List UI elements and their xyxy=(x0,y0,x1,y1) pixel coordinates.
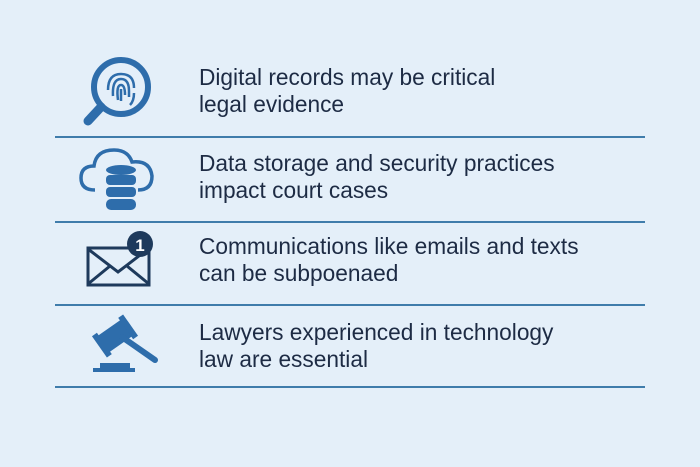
text: row 2 xyxy=(199,150,555,203)
text: row 2: Data storage and security practices xyxy=(199,150,555,176)
text: row 1: Digital records may be critical xyxy=(199,64,495,90)
icon: cloud database xyxy=(81,150,152,210)
icon: envelope with badge xyxy=(88,231,153,285)
icon: gavel xyxy=(92,314,155,372)
text: row 4: law are essential xyxy=(199,346,368,372)
icon: magnifier fingerprint xyxy=(88,60,148,121)
text: row 4: Lawyers experienced in technology xyxy=(199,319,553,345)
text: row 3 xyxy=(199,233,579,286)
icon: envelope with badge: 1 xyxy=(135,236,145,255)
text: row 2: impact court cases xyxy=(199,176,388,202)
text: row 1: legal evidence xyxy=(199,90,344,116)
text: row 4 xyxy=(199,319,554,372)
text: row 3: Communications like emails and texts xyxy=(199,233,579,259)
text: row 3: can be subpoenaed xyxy=(199,260,398,286)
text: row 1 xyxy=(199,64,495,117)
